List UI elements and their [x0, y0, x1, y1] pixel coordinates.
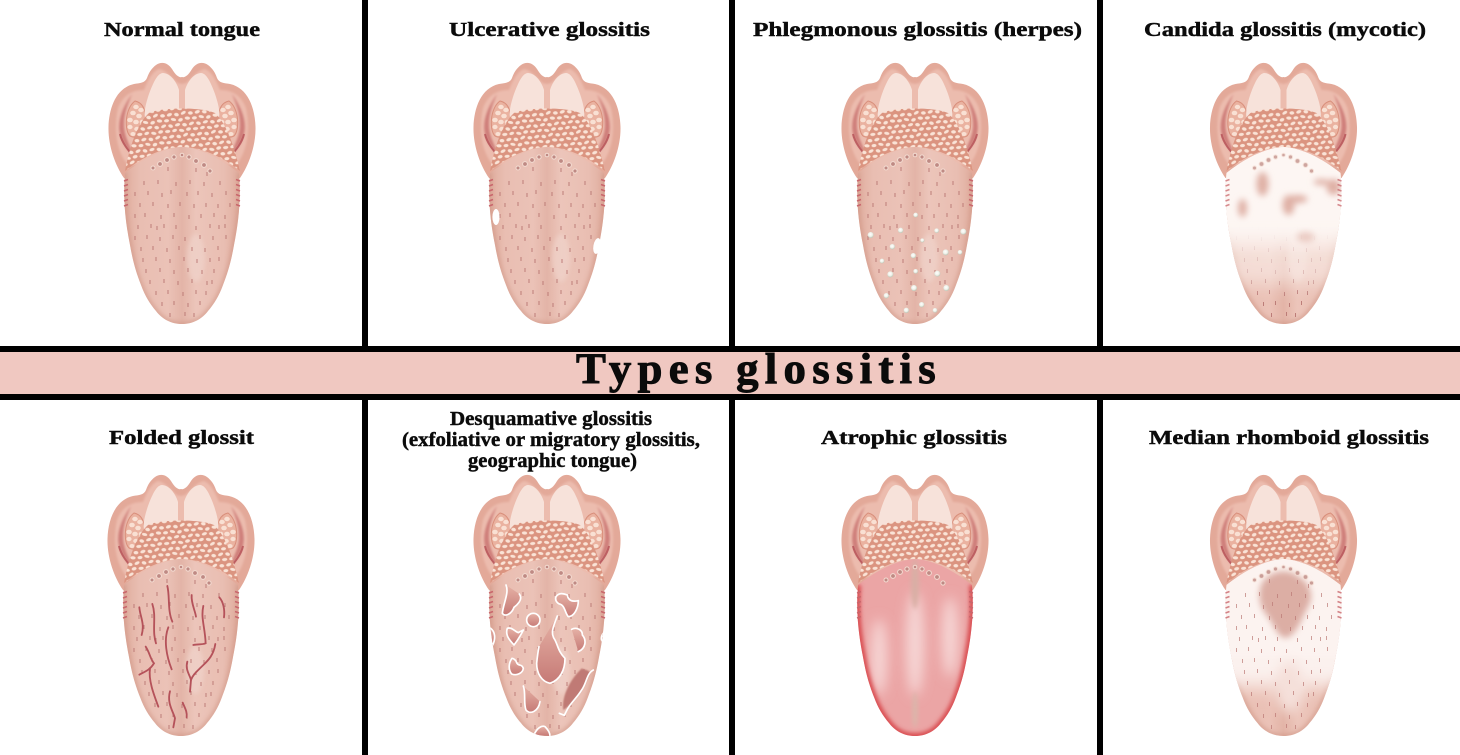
- tongue illustration: candida with white coating: [1204, 63, 1364, 324]
- panel: normal tongue: [0, 0, 362, 346]
- panel: desquamative glossitis: [402, 410, 700, 736]
- panel: candida glossitis: [1144, 22, 1426, 324]
- title band: [0, 346, 1460, 400]
- panel: phlegmonous glossitis: [735, 0, 1097, 346]
- panel: atrophic glossitis: [820, 430, 1007, 736]
- heading: candida glossitis: Candida glossitis (mycotic): [1144, 19, 1426, 41]
- panel: ulcerative glossitis: [368, 0, 729, 346]
- tongue illustration: phlegmonous with pearly vesicles: [841, 63, 989, 324]
- heading: desquamative glossitis: [402, 408, 700, 472]
- panel: median rhomboid glossitis: [1149, 430, 1429, 736]
- heading: atrophic glossitis: Atrophic glossitis: [821, 427, 1007, 449]
- heading: desquamative glossitis: Desquamative glossitis: [450, 408, 652, 430]
- tongue illustration: ulcerative with white ulcers: [473, 63, 621, 324]
- tongue illustration: median rhomboid with central patch: [1204, 475, 1364, 736]
- heading: desquamative glossitis: (exfoliative or migratory glossitis,: [402, 429, 700, 451]
- tongue illustration: normal: [108, 63, 256, 324]
- heading: ulcerative glossitis: Ulcerative glossitis: [449, 19, 650, 41]
- panel: folded glossitis: [0, 400, 362, 755]
- tongue illustration: atrophic smooth red tongue: [841, 475, 989, 736]
- heading: folded glossit: Folded glossit: [109, 427, 254, 449]
- heading: normal tongue: Normal tongue: [104, 19, 260, 41]
- heading: median rhomboid glossitis: Median rhomboid glossitis: [1149, 427, 1429, 449]
- main title: Types glossitis: [576, 346, 942, 393]
- tongue illustration: folded with fissures: [107, 475, 255, 736]
- heading: phlegmonous glossitis: Phlegmonous glossitis (herpes): [753, 19, 1082, 41]
- divider bars: [362, 0, 1103, 755]
- tongue illustration: geographic tongue with lesions: [473, 475, 621, 736]
- heading: desquamative glossitis: geographic tongue): [468, 450, 637, 472]
